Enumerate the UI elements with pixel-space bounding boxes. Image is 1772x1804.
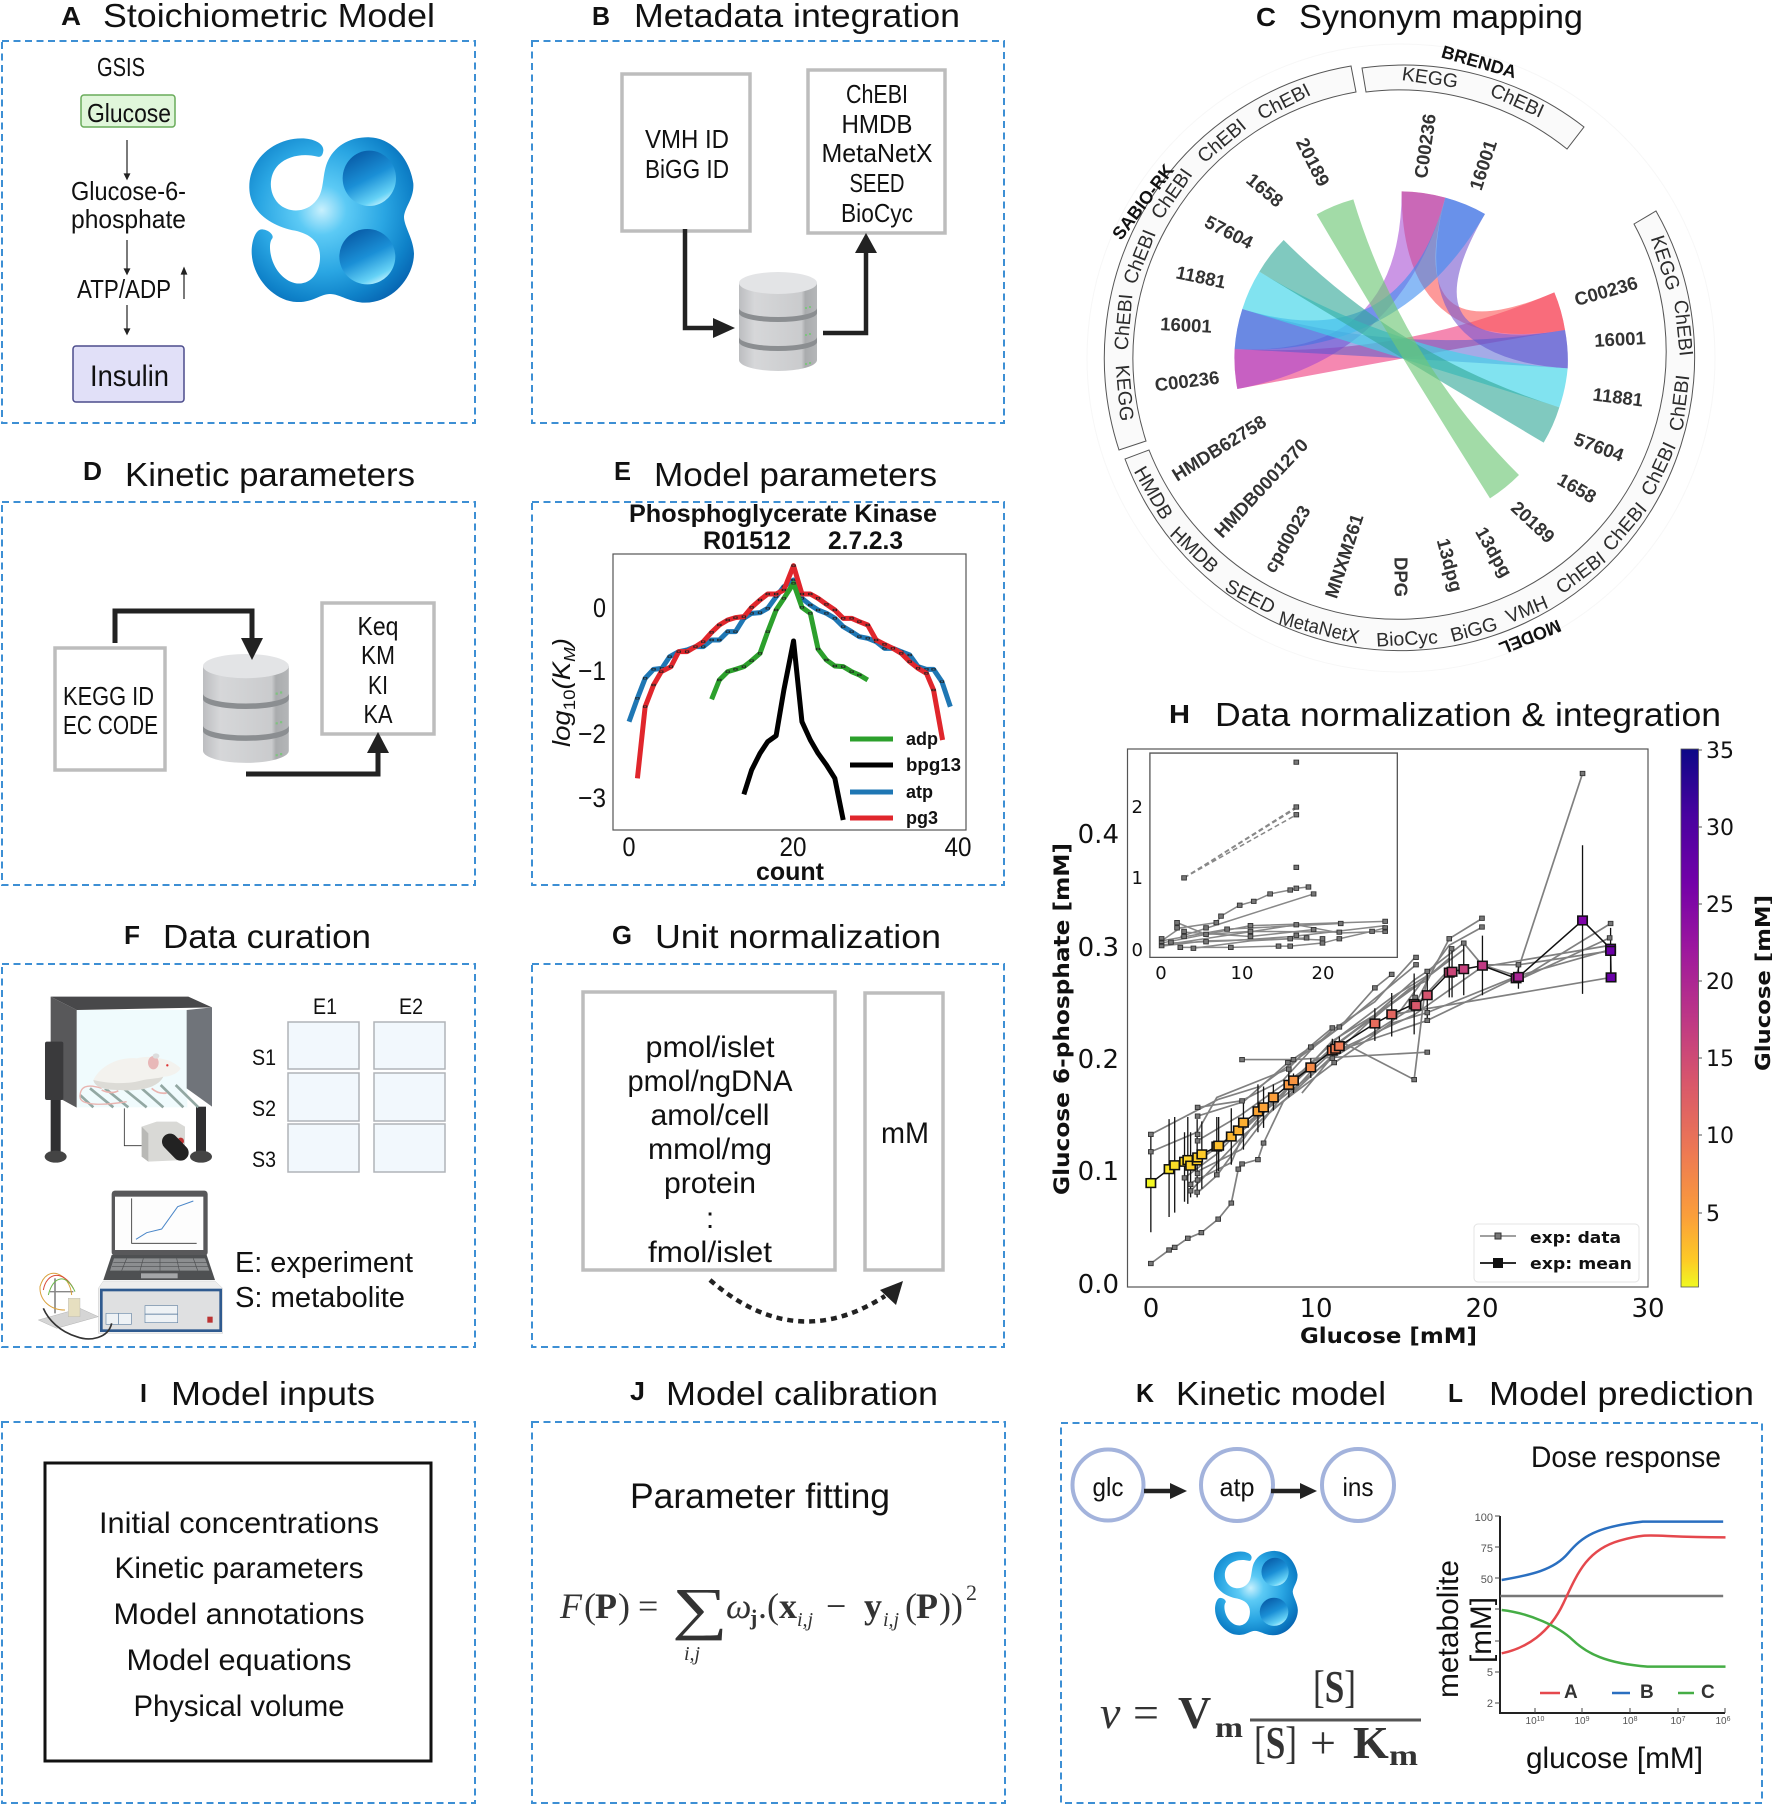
y axis label: [mM] — [1465, 1597, 1498, 1663]
legend: exp: data — [1530, 1228, 1621, 1247]
icon: software logo — [249, 137, 414, 303]
y axis label — [1432, 1560, 1498, 1698]
box: parameter list: Keq — [358, 611, 398, 641]
box: input list: Physical volume — [134, 1690, 344, 1723]
formula: objective function: − — [826, 1586, 846, 1626]
radial identifier labels — [1154, 112, 1646, 601]
formula: Michaelis-Menten: ν — [1100, 1687, 1121, 1738]
radial identifier labels: 13dpg — [1433, 536, 1467, 594]
radial identifier labels: 11881 — [1592, 384, 1644, 410]
dose response chart: 9 — [1586, 1716, 1590, 1723]
inset tick labels: 10 — [1231, 963, 1253, 984]
insulin box — [73, 346, 184, 402]
chart title: 2.7.2.3 — [828, 527, 903, 555]
formula: Michaelis-Menten: m — [1215, 1711, 1243, 1744]
heading H: H — [1169, 699, 1190, 729]
colour bar — [1681, 739, 1772, 1287]
ring labels — [1108, 42, 1697, 658]
colour bar: 5 — [1706, 1202, 1720, 1227]
radial identifier labels: 20189 — [1292, 134, 1334, 190]
heading E: Model parameters — [654, 456, 937, 493]
ring labels: BioCyc — [1376, 626, 1439, 652]
box: input list — [45, 1463, 431, 1761]
panel C: chord diagram — [1087, 42, 1715, 672]
dose response chart: 50 — [1481, 1574, 1493, 1586]
grid labels: E1 — [313, 994, 337, 1019]
axis tick labels: −1 — [578, 656, 606, 686]
chart title: R01512 — [703, 527, 791, 555]
box: source units: pmol/ngDNA — [628, 1065, 792, 1098]
ring labels: KEGG — [1646, 233, 1684, 293]
y axis label: metabolite — [1432, 1560, 1465, 1698]
error bars — [1151, 845, 1611, 1232]
radial identifier labels: C00236 — [1410, 112, 1440, 180]
heading B: B — [592, 1, 610, 31]
radial identifier labels: DPG — [1390, 557, 1412, 597]
x tick labels: 10 — [1299, 1294, 1333, 1324]
ring labels: ChEBI — [1193, 114, 1251, 168]
radial identifier labels: MNXM261 — [1321, 511, 1367, 601]
heading A: A — [61, 1, 81, 31]
node: ins — [1322, 1449, 1394, 1521]
panel E: model parameters chart — [532, 500, 1004, 886]
chords — [1234, 191, 1568, 498]
axis tick labels — [578, 593, 972, 862]
formula: objective function: ) — [618, 1586, 630, 1626]
radial identifier labels: 57604 — [1201, 211, 1257, 253]
formula: objective function: ( — [905, 1586, 917, 1626]
ring labels: ChEBI — [1598, 498, 1652, 556]
experimental data lines — [1146, 771, 1616, 1266]
grid labels: S2 — [252, 1096, 276, 1121]
panel I: model inputs — [2, 1422, 475, 1803]
ring labels: HMDB — [1129, 463, 1177, 523]
legend: pg3 — [906, 808, 938, 828]
axis tick labels: 40 — [944, 832, 972, 862]
formula: Michaelis-Menten: [S] — [1313, 1661, 1356, 1712]
arrow — [1144, 1483, 1187, 1499]
legend: exp: mean — [1530, 1254, 1632, 1273]
main tick labels: 0.3 — [1078, 933, 1119, 963]
radial identifier labels: 1658 — [1242, 169, 1288, 211]
formula: objective function: ( — [584, 1586, 596, 1626]
box: parameter list: KI — [368, 670, 388, 700]
box: input list: Initial concentrations — [99, 1507, 379, 1540]
inset tick labels: 1 — [1132, 868, 1143, 889]
main tick labels: 0.1 — [1078, 1157, 1119, 1187]
inset tick labels: 20 — [1312, 963, 1334, 984]
arrow into database — [115, 611, 263, 660]
y axis label: ) — [548, 638, 576, 650]
dose response chart: 2 — [1487, 1698, 1493, 1710]
node: glc — [1072, 1450, 1144, 1520]
formula: Michaelis-Menten: + — [1310, 1717, 1336, 1768]
box: database list: HMDB — [842, 109, 912, 139]
grid labels: S1 — [252, 1045, 276, 1070]
illustration: mouse chamber — [45, 997, 212, 1163]
radial identifier labels: 20189 — [1507, 497, 1559, 547]
insulin box: Insulin — [90, 360, 169, 393]
colour bar: 30 — [1706, 816, 1734, 841]
heading C: C — [1256, 2, 1276, 32]
radial identifier labels: 16001 — [1465, 137, 1501, 193]
arrow — [1271, 1483, 1317, 1499]
dose response chart: 100 — [1475, 1512, 1493, 1524]
arrow to database — [685, 229, 735, 338]
axis tick labels: −3 — [578, 783, 606, 813]
heading D: D — [83, 456, 102, 486]
dose response chart: 10 — [1670, 1716, 1682, 1727]
formula: objective function: i,j — [797, 1609, 814, 1631]
legend: adp — [906, 729, 938, 749]
text: GSIS: GSIS — [97, 52, 145, 82]
panel F: data curation — [2, 964, 475, 1347]
panel A: stoichiometric model — [2, 41, 475, 423]
heading F: Data curation — [163, 918, 371, 955]
y axis label: (K — [548, 660, 576, 689]
text: glucose-6-phosphate: Glucose-6- — [71, 176, 186, 206]
radial identifier labels: C00236 — [1154, 367, 1220, 395]
curve legend: A — [1564, 1682, 1578, 1703]
inset tick labels: 0 — [1132, 940, 1143, 961]
chart title: Phosphoglycerate Kinase — [629, 500, 937, 528]
icon: database — [739, 272, 817, 371]
x tick labels: 20 — [1465, 1294, 1499, 1324]
text: parameter fitting: Parameter fitting — [630, 1477, 890, 1516]
heading I: I — [140, 1378, 147, 1408]
grid labels: S3 — [252, 1147, 276, 1172]
radial identifier labels: 11881 — [1174, 261, 1228, 293]
radial identifier labels: 16001 — [1160, 313, 1212, 337]
text: dose response: Dose response — [1531, 1441, 1721, 1474]
node: atp: atp — [1220, 1472, 1254, 1502]
ring labels: MODEL — [1496, 616, 1564, 658]
ring labels: BRENDA — [1439, 42, 1519, 82]
legend: atp — [906, 782, 933, 802]
axis tick labels: 20 — [780, 832, 806, 862]
dashed conversion arrow — [710, 1280, 903, 1321]
box: input list: Model annotations — [114, 1598, 364, 1631]
arrow to parameters — [246, 732, 389, 774]
ring labels: BiGG — [1448, 613, 1500, 647]
dose response chart: 5 — [1487, 1667, 1493, 1679]
box: source units: mmol/mg — [648, 1133, 772, 1166]
ring labels: ChEBI — [1669, 299, 1697, 357]
box: parameter list: KA — [364, 699, 393, 729]
curve legend: C — [1701, 1682, 1715, 1703]
formula: Michaelis-Menten: m — [1389, 1739, 1418, 1772]
ring labels: ChEBI — [1119, 227, 1161, 287]
dose response chart: 10 — [1526, 1716, 1537, 1727]
formula: objective function: 2 — [966, 1580, 977, 1605]
ring labels: VMH — [1503, 592, 1551, 628]
heading F: F — [124, 920, 140, 950]
formula: Michaelis-Menten: V — [1178, 1687, 1211, 1738]
box: source units: amol/cell — [650, 1099, 770, 1132]
legend: bpg13 — [906, 755, 961, 775]
box: database list: SEED — [850, 168, 904, 198]
main tick labels — [1078, 820, 1119, 1300]
main tick labels: 0.0 — [1078, 1270, 1119, 1300]
pathway arrows — [124, 140, 186, 334]
ring labels: MetaNetX — [1277, 607, 1361, 649]
colour bar: 25 — [1706, 893, 1734, 918]
x axis label: count — [756, 858, 825, 886]
ring labels: ChEBI — [1487, 79, 1547, 123]
node: ins: ins — [1342, 1472, 1374, 1502]
ring labels: ChEBI — [1666, 374, 1694, 432]
y axis label: M — [562, 646, 579, 662]
box: database list: BioCyc — [841, 198, 913, 228]
ring labels: SEED — [1221, 575, 1279, 619]
ring labels: KEGG — [1401, 63, 1459, 93]
dose response chart: 6 — [1727, 1716, 1731, 1723]
dose response chart: 8 — [1634, 1716, 1638, 1723]
box: input list: Kinetic parameters — [114, 1552, 364, 1585]
box: KEGG ID, EC code — [55, 648, 165, 770]
ring labels: ChEBI — [1254, 79, 1314, 125]
dose response chart — [1475, 1512, 1731, 1727]
formula: objective function: i,j — [684, 1643, 701, 1665]
key text — [235, 1247, 413, 1314]
dose response chart: 10 — [1537, 1716, 1545, 1723]
curve legend — [1540, 1682, 1715, 1703]
text: glucose-6-phosphate: phosphate — [71, 204, 186, 234]
grid labels — [252, 994, 423, 1172]
legend — [850, 729, 961, 828]
mean line — [1151, 920, 1611, 1183]
box: VMH and BiGG IDs: VMH ID — [645, 124, 729, 154]
glucose box: Glucose — [87, 98, 171, 128]
node: glc: glc — [1092, 1472, 1124, 1502]
radial identifier labels: HMDB0001270 — [1210, 434, 1312, 542]
ring labels: KEGG — [1111, 364, 1137, 422]
x tick labels: 30 — [1631, 1294, 1665, 1324]
box: target unit — [865, 993, 943, 1270]
inset tick labels — [1132, 797, 1334, 984]
data markers — [1149, 771, 1613, 1266]
legend — [1474, 1224, 1639, 1282]
chart title — [629, 500, 937, 555]
dose response chart: 75 — [1481, 1543, 1493, 1555]
formula: objective function: . — [758, 1586, 767, 1626]
dose response chart: 10 — [1715, 1716, 1727, 1727]
heading K: Kinetic model — [1176, 1375, 1386, 1412]
ring labels: ChEBI — [1552, 547, 1610, 599]
y axis label: 10 — [560, 689, 579, 710]
heading H: Data normalization & integration — [1215, 696, 1721, 733]
grid: experiments vs metabolites — [288, 1022, 445, 1172]
formula: Michaelis-Menten — [1100, 1661, 1421, 1772]
text: ATP/ADP: ATP/ADP — [77, 274, 171, 304]
radial identifier labels: 1658 — [1554, 469, 1600, 507]
y axis label: log — [548, 714, 576, 747]
panel G: unit normalization — [532, 964, 1004, 1347]
box: database list — [808, 70, 945, 233]
formula: objective function — [559, 1577, 977, 1665]
formula: objective function: = — [638, 1586, 658, 1626]
curve legend: B — [1640, 1682, 1654, 1703]
box: source units — [583, 992, 835, 1270]
plot frame — [1128, 749, 1648, 1287]
formula: objective function: x — [779, 1586, 797, 1626]
formula: Michaelis-Menten: [S] — [1254, 1717, 1297, 1768]
radial identifier labels: 13dpg — [1471, 523, 1517, 581]
box: source units: fmol/islet — [648, 1236, 773, 1269]
key text: E: experiment — [235, 1247, 413, 1279]
panel J: model calibration — [532, 1422, 1005, 1803]
formula: objective function: ( — [767, 1586, 779, 1626]
ring labels: ChEBI — [1147, 165, 1197, 223]
box: parameter list: KM — [361, 640, 395, 670]
x axis label: Glucose [mM] — [1300, 1324, 1477, 1348]
icon: software logo small — [1214, 1551, 1298, 1635]
axis tick labels: −2 — [578, 719, 606, 749]
x tick labels — [1143, 1294, 1665, 1324]
heading I: Model inputs — [171, 1375, 375, 1412]
dose response chart: 10 — [1574, 1716, 1586, 1727]
node: atp — [1201, 1449, 1273, 1521]
radial identifier labels: 16001 — [1594, 327, 1646, 351]
box: VMH and BiGG IDs: BiGG ID — [645, 154, 729, 184]
axes frame — [613, 554, 966, 830]
arrow from database — [823, 233, 877, 333]
x tick labels: 0 — [1143, 1294, 1159, 1324]
formula: Michaelis-Menten: = — [1133, 1687, 1159, 1738]
panel D: kinetic parameters — [2, 502, 475, 885]
ring segments — [1104, 65, 1695, 651]
panel K and L: kinetic model and prediction — [1061, 1423, 1762, 1803]
heading D: Kinetic parameters — [125, 456, 415, 493]
box: KEGG ID, EC code: EC CODE — [63, 710, 158, 740]
ring labels: HMDB — [1166, 522, 1222, 578]
radial identifier labels: cpd0023 — [1259, 502, 1315, 576]
box: source units: protein — [664, 1167, 756, 1200]
box: source units: : — [706, 1202, 714, 1235]
heading J: J — [630, 1376, 645, 1406]
ring labels: SABIO-RK — [1108, 160, 1178, 244]
box: VMH and BiGG IDs — [622, 74, 750, 231]
formula: objective function: P — [595, 1586, 617, 1626]
formula: objective function: )) — [939, 1586, 963, 1626]
colour bar: 35 — [1706, 739, 1734, 764]
panel H: glucose 6-phosphate scatter — [1050, 739, 1772, 1348]
formula: objective function: j — [749, 1605, 757, 1630]
heading L: Model prediction — [1489, 1375, 1754, 1412]
inset tick labels: 2 — [1132, 797, 1143, 818]
ring labels: ChEBI — [1637, 439, 1681, 499]
radial identifier labels: 57604 — [1571, 428, 1627, 466]
inset tick labels: 0 — [1155, 963, 1167, 984]
box: database list: ChEBI — [846, 79, 908, 109]
formula: objective function: F — [559, 1586, 583, 1626]
formula: objective function: ∑ — [672, 1577, 728, 1641]
box: database list: MetaNetX — [822, 138, 932, 168]
colour bar: 15 — [1706, 1047, 1734, 1072]
heading J: Model calibration — [666, 1375, 938, 1412]
formula: objective function: ω — [726, 1586, 751, 1626]
heading L: L — [1448, 1378, 1463, 1408]
colour bar: 20 — [1706, 970, 1734, 995]
main tick labels: 0.2 — [1078, 1045, 1119, 1075]
illustration: laptop and instrument — [38, 1191, 223, 1339]
heading E: E — [614, 456, 631, 486]
axis tick labels: 0 — [622, 832, 636, 862]
text: glucose-6-phosphate — [71, 176, 186, 234]
formula: objective function: P — [916, 1586, 938, 1626]
panel B: metadata integration — [532, 41, 1004, 423]
radial identifier labels: HMDB62758 — [1168, 411, 1270, 485]
box: target unit: mM — [881, 1117, 929, 1150]
box: source units: pmol/islet — [646, 1031, 775, 1064]
key text: S: metabolite — [235, 1282, 405, 1314]
radial identifier labels: C00236 — [1572, 272, 1640, 310]
formula: objective function: i,j — [883, 1609, 900, 1631]
line chart — [629, 566, 950, 820]
x axis label: glucose [mM] — [1526, 1742, 1703, 1775]
inset chart — [1150, 753, 1397, 957]
icon: database — [203, 654, 289, 763]
formula: objective function: y — [864, 1586, 882, 1626]
axis tick labels: 0 — [593, 593, 606, 623]
mean markers — [1146, 916, 1616, 1187]
colour bar: 10 — [1706, 1124, 1734, 1149]
formula: Michaelis-Menten: K — [1353, 1717, 1389, 1768]
y axis label: Glucose 6-phosphate [mM] — [1050, 843, 1074, 1195]
dose response chart: 10 — [1622, 1716, 1634, 1727]
main tick labels: 0.4 — [1078, 820, 1119, 850]
heading G: Unit normalization — [655, 918, 941, 955]
ring labels: ChEBI — [1111, 293, 1137, 351]
grid labels: E2 — [399, 994, 423, 1019]
box: parameter list — [322, 603, 434, 734]
box: input list: Model equations — [126, 1644, 352, 1677]
box: KEGG ID, EC code: KEGG ID — [63, 681, 154, 711]
heading G: G — [612, 920, 632, 950]
heading K: K — [1136, 1378, 1154, 1408]
dose response chart: 7 — [1682, 1716, 1686, 1723]
